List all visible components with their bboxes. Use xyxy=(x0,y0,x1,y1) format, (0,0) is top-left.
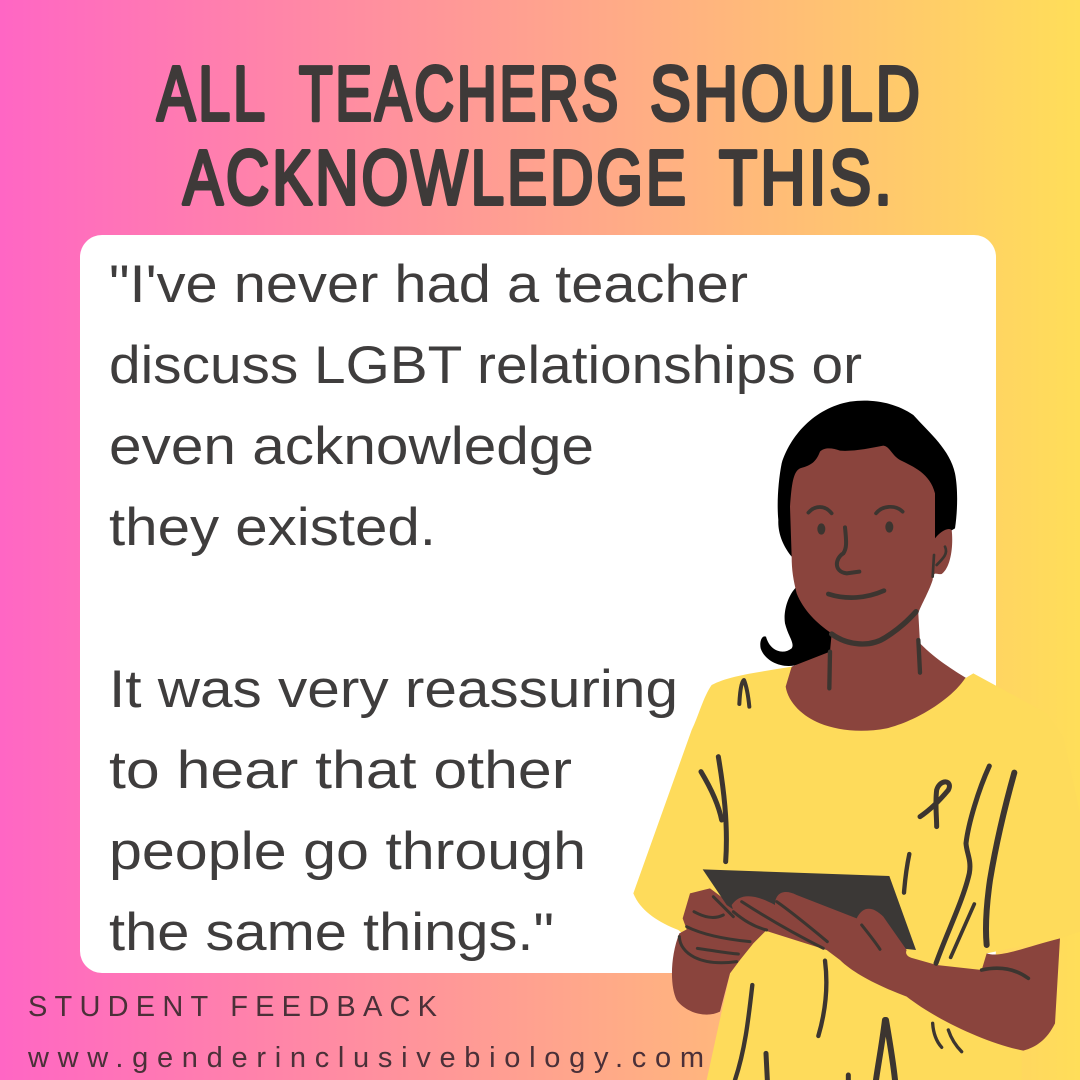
clothing and finger lines xyxy=(679,757,1028,1080)
lower body group xyxy=(672,757,1060,1080)
quote text: they existed. xyxy=(109,498,436,557)
quote text: even acknowledge xyxy=(109,417,594,476)
face details xyxy=(739,507,946,707)
quote text: to hear that other xyxy=(109,741,572,800)
title: SHOULD xyxy=(650,51,923,137)
quote text xyxy=(109,255,862,962)
left forearm and fist xyxy=(672,888,767,1015)
title xyxy=(157,51,923,221)
title: TEACHERS xyxy=(299,51,621,137)
quote text: "I've never had a teacher xyxy=(109,255,748,314)
panel: white quote card xyxy=(80,235,996,973)
title: THIS. xyxy=(719,135,895,221)
tablet xyxy=(703,869,916,950)
skin: face and neck xyxy=(777,446,967,737)
illustration: student holding a tablet xyxy=(633,401,1080,1080)
hair xyxy=(760,401,957,666)
quote text: discuss LGBT relationships or xyxy=(109,336,862,395)
source label: STUDENT FEEDBACK xyxy=(28,991,438,1023)
quote text: the same things." xyxy=(109,903,554,962)
website: www.genderinclusivebiology.com xyxy=(27,1042,704,1074)
title: ALL xyxy=(157,51,268,137)
quote text: It was very reassuring xyxy=(109,660,678,719)
quote text: people go through xyxy=(109,822,586,881)
right hand and arm xyxy=(732,892,1060,1051)
shirt xyxy=(633,667,1080,1080)
title: ACKNOWLEDGE xyxy=(183,135,689,221)
